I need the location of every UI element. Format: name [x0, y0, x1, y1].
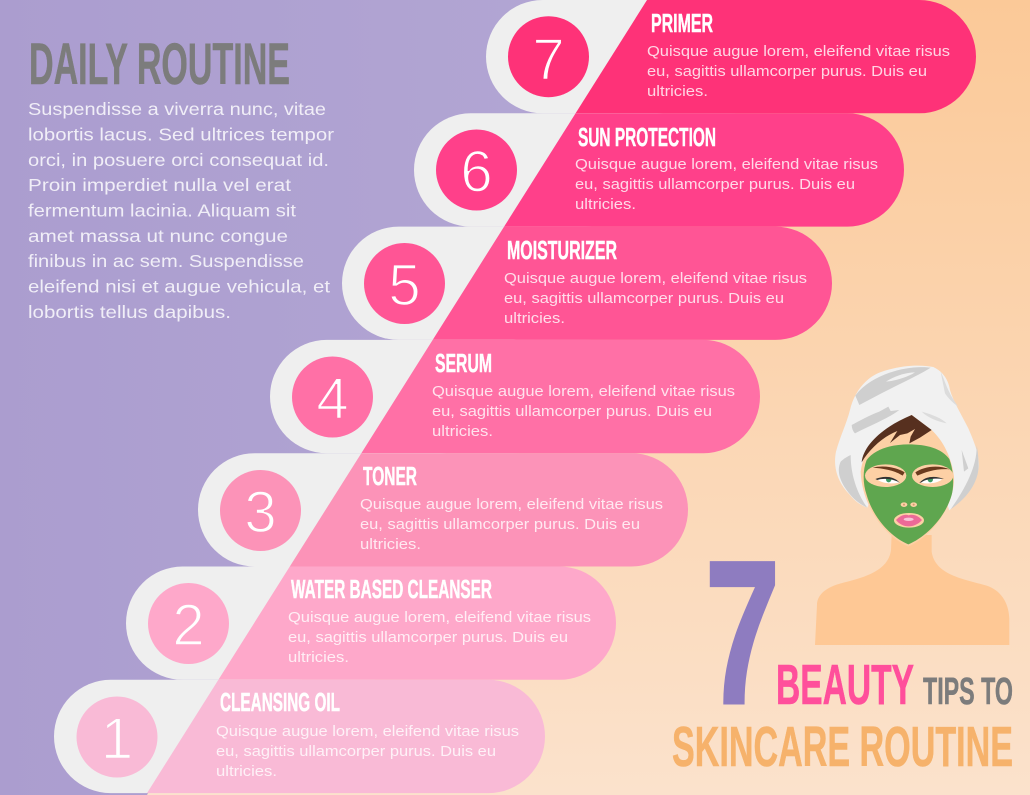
- hair: [862, 415, 932, 462]
- number badge 4: [292, 356, 373, 438]
- step 1: cleansing oil: [54, 680, 545, 793]
- description 5: Quisque augue lorem, eleifend vitae risus: [504, 271, 807, 287]
- number badge 3: [220, 470, 301, 551]
- description 1: eu, sagittis ullamcorper purus. Duis eu: [216, 744, 496, 760]
- description 7: [647, 44, 950, 100]
- heading: daily routine: DAILY ROUTINE: [29, 32, 290, 97]
- intro paragraph: eleifend nisi et augue vehicula, et: [28, 276, 330, 296]
- description 7: ultricies.: [647, 84, 708, 100]
- towel: [835, 366, 979, 510]
- nostrils: [901, 502, 917, 507]
- number badge 1: 1: [101, 706, 133, 772]
- description 7: eu, sagittis ullamcorper purus. Duis eu: [647, 64, 927, 80]
- title: cleansing oil: CLEANSING OIL: [220, 687, 340, 717]
- number badge 7: 7: [532, 28, 565, 92]
- title: serum: SERUM: [435, 348, 492, 378]
- number badge 2: [148, 583, 229, 664]
- title: sun protection: SUN PROTECTION: [578, 122, 716, 152]
- description 3: eu, sagittis ullamcorper purus. Duis eu: [360, 517, 640, 533]
- number badge 4: 4: [316, 366, 349, 432]
- description 3: ultricies.: [360, 537, 421, 553]
- green mask: [864, 444, 953, 544]
- left eye: [865, 464, 906, 487]
- description 2: ultricies.: [288, 650, 349, 666]
- number badge 5: [364, 243, 445, 324]
- lips: [894, 513, 924, 528]
- intro paragraph: finibus in ac sem. Suspendisse: [28, 251, 304, 271]
- right eye: [912, 464, 953, 487]
- number badge 5: 5: [388, 253, 421, 318]
- step 6: sun protection: [414, 113, 904, 227]
- shoulders and neck: [815, 535, 1009, 645]
- title block: [672, 519, 1013, 779]
- description 6: Quisque augue lorem, eleifend vitae risus: [575, 157, 878, 173]
- illustration: woman with towel and green face mask: [815, 366, 1009, 645]
- intro paragraph: amet massa ut nunc congue: [28, 226, 288, 246]
- intro paragraph: lobortis lacus. Sed ultrices tempor: [28, 124, 334, 144]
- description 4: [432, 384, 735, 440]
- description 2: Quisque augue lorem, eleifend vitae risus: [288, 610, 591, 626]
- number badge 6: 6: [460, 140, 493, 204]
- description 4: ultricies.: [432, 424, 493, 440]
- description 1: [216, 724, 519, 780]
- description 6: eu, sagittis ullamcorper purus. Duis eu: [575, 177, 855, 193]
- word: beauty: BEAUTY: [776, 653, 914, 717]
- background: lavender side: [0, 0, 648, 795]
- number badge 1: [76, 696, 158, 778]
- intro paragraph: [28, 99, 334, 322]
- description 1: ultricies.: [216, 764, 277, 780]
- intro paragraph: fermentum lacinia. Aliquam sit: [28, 200, 296, 220]
- intro paragraph: Proin imperdiet nulla vel erat: [28, 175, 291, 195]
- title: primer: PRIMER: [651, 8, 713, 38]
- description 4: eu, sagittis ullamcorper purus. Duis eu: [432, 404, 712, 420]
- description 1: Quisque augue lorem, eleifend vitae risus: [216, 724, 519, 740]
- number badge 6: [436, 130, 517, 210]
- description 2: [288, 610, 591, 666]
- title: moisturizer: MOISTURIZER: [507, 235, 617, 265]
- description 5: [504, 271, 807, 327]
- step 4: serum: [270, 340, 760, 453]
- description 4: Quisque augue lorem, eleifend vitae risus: [432, 384, 735, 400]
- description 3: [360, 497, 663, 553]
- number badge 7: [508, 16, 589, 97]
- step 7: primer: [486, 0, 976, 113]
- step 2: water based cleanser: [126, 566, 616, 680]
- intro paragraph: Suspendisse a viverra nunc, vitae: [28, 99, 326, 119]
- step 3: toner: [198, 453, 688, 566]
- face: [861, 415, 954, 547]
- title: toner: TONER: [363, 461, 417, 491]
- number badge 3: 3: [244, 480, 277, 545]
- description 2: eu, sagittis ullamcorper purus. Duis eu: [288, 630, 568, 646]
- title: water based cleanser: WATER BASED CLEANSER: [291, 574, 492, 604]
- description 5: eu, sagittis ullamcorper purus. Duis eu: [504, 291, 784, 307]
- intro paragraph: lobortis tellus dapibus.: [28, 302, 231, 322]
- big numeral 7: 7: [705, 519, 780, 747]
- description 5: ultricies.: [504, 311, 565, 327]
- description 3: Quisque augue lorem, eleifend vitae risus: [360, 497, 663, 513]
- step 5: moisturizer: [342, 227, 832, 340]
- description 7: Quisque augue lorem, eleifend vitae risus: [647, 44, 950, 60]
- description 6: ultricies.: [575, 197, 636, 213]
- number badge 2: 2: [172, 593, 205, 658]
- intro paragraph: orci, in posuere orci consequat id.: [28, 150, 329, 170]
- description 6: [575, 157, 878, 213]
